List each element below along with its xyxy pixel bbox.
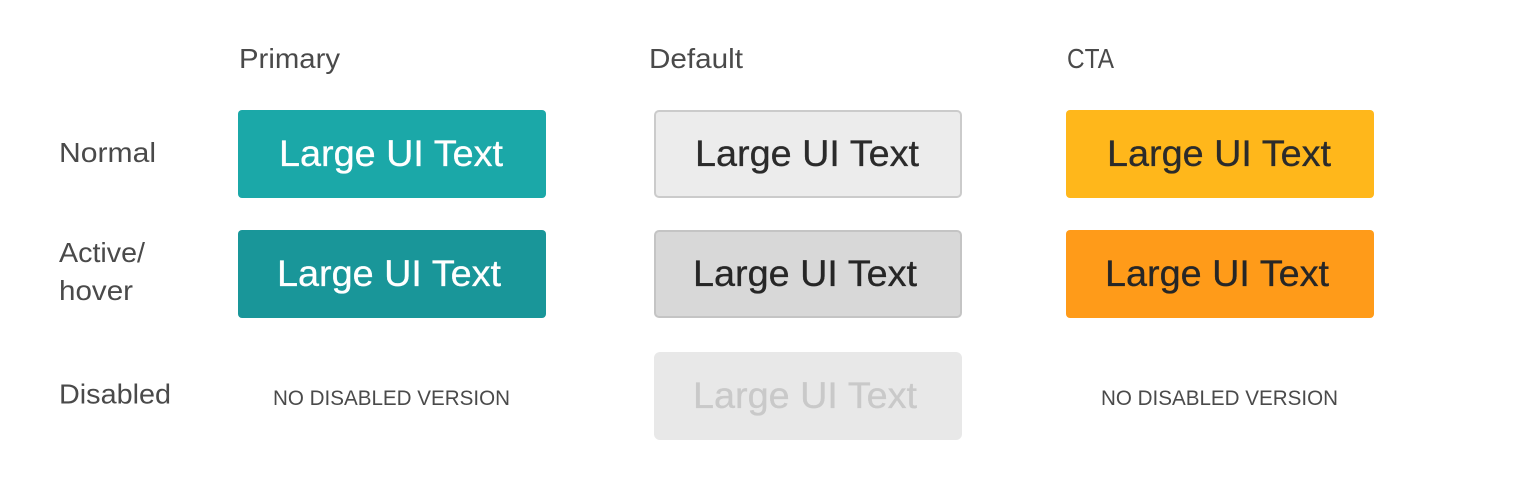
- column heading: Default: Default: [649, 43, 743, 74]
- row label: Active/hover: [59, 237, 145, 306]
- row label: Active/hover: Active/: [59, 237, 145, 268]
- button: default active: [655, 231, 961, 317]
- button: primary normal: [238, 110, 546, 198]
- button: CTA normal: [1066, 110, 1374, 198]
- note: primary has no disabled version: NO DISABLED VERSION: [273, 387, 510, 410]
- column heading: CTA: CTA: [1067, 43, 1114, 74]
- button: default normal: [655, 111, 961, 197]
- button: default disabled: [654, 352, 962, 440]
- row label: Normal: Normal: [59, 137, 156, 168]
- row label: Disabled: Disabled: [59, 378, 171, 410]
- button: default normal: Large UI Text: [695, 133, 920, 174]
- button: CTA active: Large UI Text: [1105, 253, 1330, 294]
- button: primary normal: Large UI Text: [279, 133, 504, 174]
- note: CTA has no disabled version: NO DISABLED VERSION: [1101, 387, 1338, 410]
- button: primary active: Large UI Text: [277, 253, 502, 294]
- row label: Active/hover: hover: [59, 275, 133, 306]
- button: CTA active: [1066, 230, 1374, 318]
- column heading: Primary: Primary: [239, 43, 340, 74]
- button: default active: Large UI Text: [693, 253, 918, 294]
- button: primary active: [238, 230, 546, 318]
- button: CTA normal: Large UI Text: [1107, 133, 1332, 174]
- button: default disabled: Large UI Text: [693, 375, 918, 416]
